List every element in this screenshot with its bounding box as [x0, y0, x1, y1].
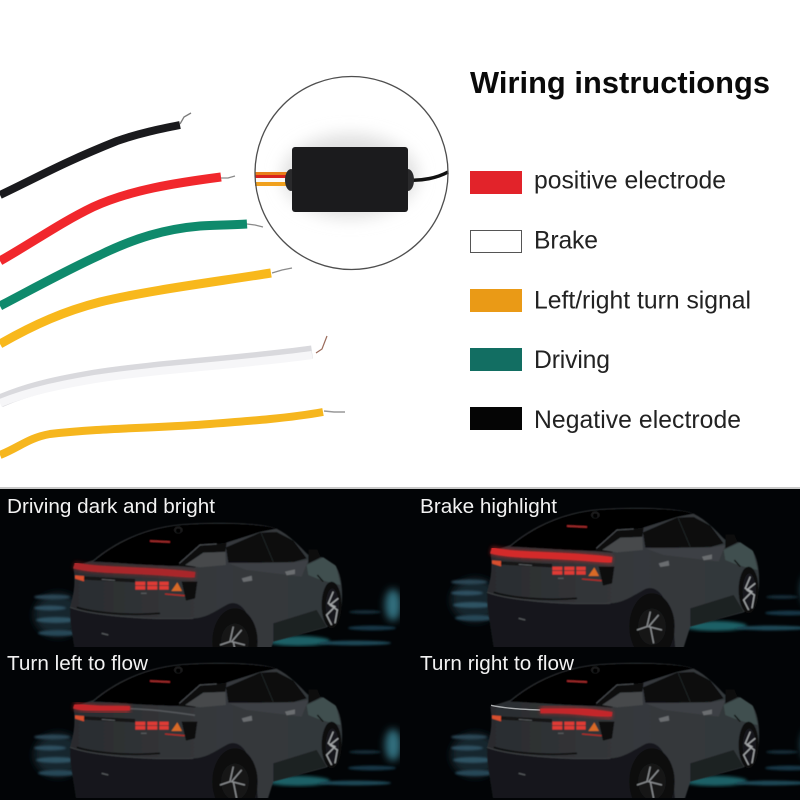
output wire: [408, 172, 448, 180]
panel: turn left to flow: [0, 647, 401, 800]
light bar: left segment lit: [74, 705, 195, 715]
wire: yellow one: [0, 273, 271, 344]
input wires: [255, 172, 291, 186]
wire: red lead: [221, 176, 235, 178]
wires photo: [0, 113, 345, 455]
caption: Turn left to flow: [7, 652, 148, 675]
wire: white highlight: [0, 355, 312, 403]
wire: black lead: [180, 113, 191, 124]
wire: green: [0, 224, 247, 306]
legend: left/right turn signal: Left/right turn signal: [534, 288, 751, 314]
panel: driving dark and bright: [8, 498, 400, 647]
legend: brake: Brake: [534, 228, 598, 254]
caption: Brake highlight: [420, 495, 557, 518]
caption: Driving dark and bright: [7, 495, 215, 518]
legend: negative electrode: Negative electrode: [534, 407, 741, 434]
wire: white lead: [316, 336, 327, 353]
circular inset: control module: [255, 76, 448, 270]
brake light bar: bright red: [491, 550, 612, 560]
panel: turn right to flow: [420, 655, 800, 798]
legend: driving: [470, 347, 610, 374]
wire: yellow one lead: [272, 268, 292, 273]
wire: white: [0, 352, 312, 401]
photo strip top rule: [0, 487, 800, 489]
running light bar: dim red: [74, 565, 195, 575]
wire: green lead: [247, 224, 263, 227]
title: Wiring instructiongs: [470, 65, 770, 100]
light bar: right segment lit: [491, 705, 612, 715]
legend: positive electrode: positive electrode: [534, 168, 726, 194]
wire: yellow two: [0, 412, 323, 455]
wire: red: [0, 177, 221, 261]
panel: brake highlight: [422, 498, 800, 647]
photo strip top edge and backing: [0, 487, 800, 800]
legend: [470, 168, 751, 434]
circle outline: [255, 76, 448, 270]
module body: [285, 147, 414, 212]
wire: yellow two lead: [324, 411, 345, 412]
legend: brake: [470, 228, 598, 254]
legend: driving: Driving: [534, 347, 610, 374]
wire: black: [0, 125, 180, 195]
caption: Turn right to flow: [420, 652, 574, 675]
